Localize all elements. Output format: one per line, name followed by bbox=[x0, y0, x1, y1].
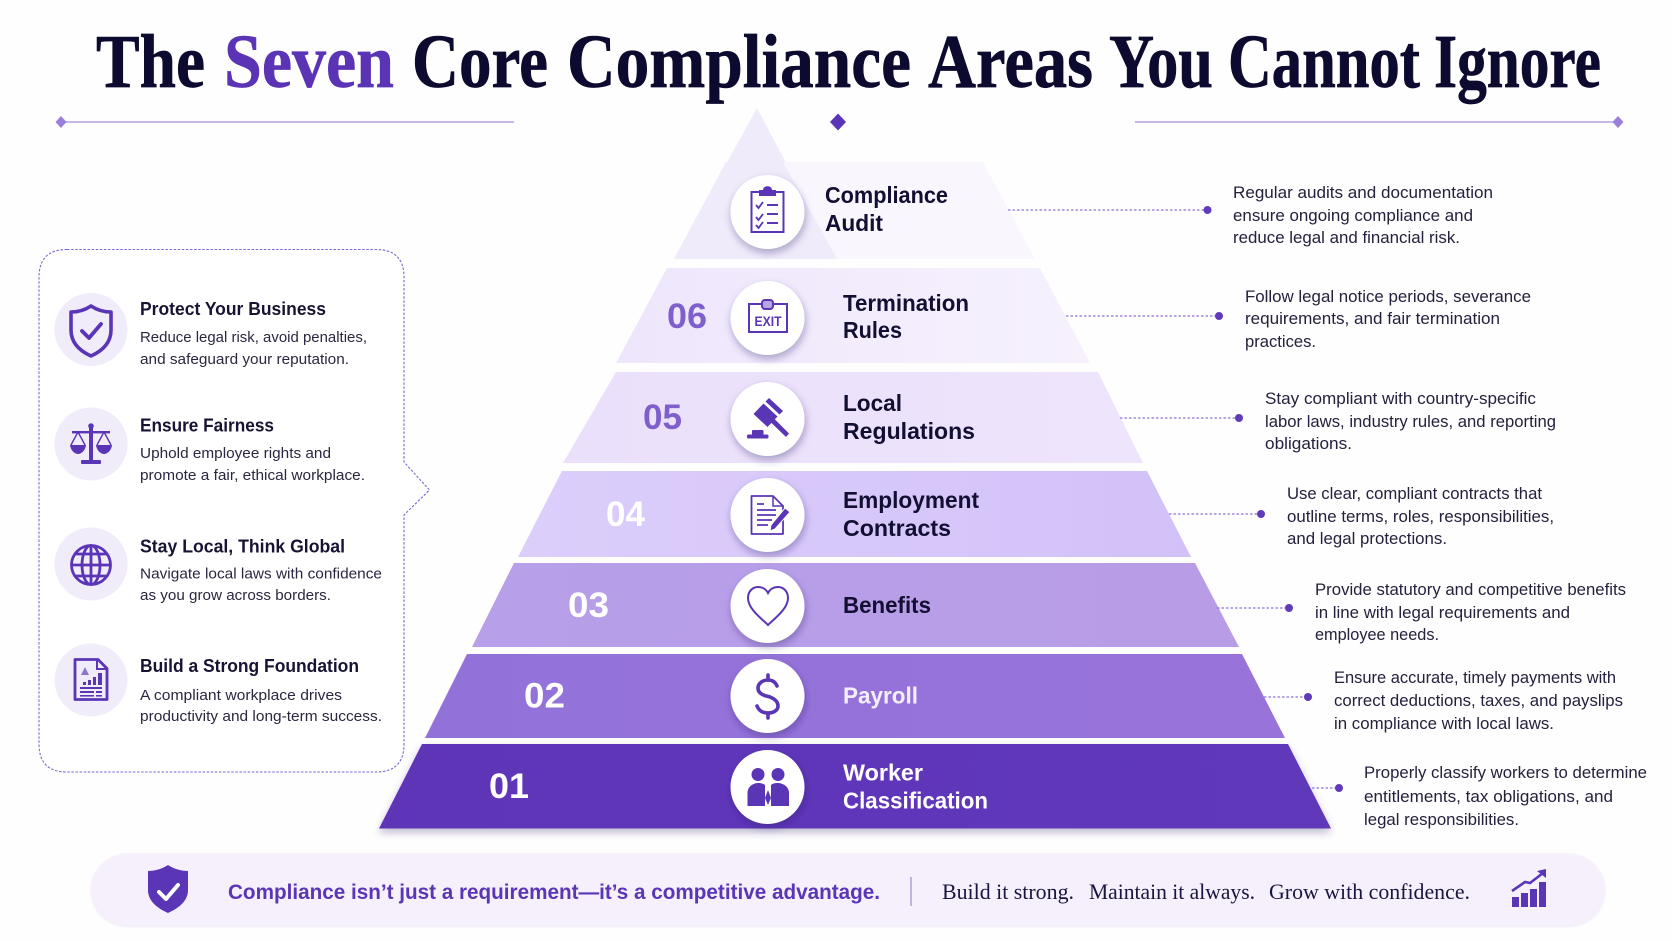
item: ensure fairness: promote a fair, ethical workplace. bbox=[140, 467, 365, 484]
tier 5: local regulations: 05 bbox=[643, 398, 682, 437]
tier 1: worker classification: Worker bbox=[843, 760, 923, 786]
tier 7: compliance audit: Audit bbox=[825, 210, 883, 236]
tier 4: employment contracts: Contracts bbox=[843, 515, 951, 541]
tier 1: worker classification: Classification bbox=[843, 788, 988, 814]
item: protect your business bbox=[54, 293, 367, 368]
icon: growth chart bbox=[1512, 869, 1546, 907]
icon: exit sign bbox=[730, 281, 804, 355]
tier 6: termination rules: Termination bbox=[843, 290, 969, 316]
callout: local regulations bbox=[1120, 390, 1556, 453]
tier 3: benefits: Benefits bbox=[843, 592, 931, 618]
icon: exit sign: EXIT bbox=[754, 313, 782, 329]
item: protect your business: Protect Your Business bbox=[140, 299, 326, 319]
pyramid bbox=[379, 108, 1331, 828]
callout: worker classification: legal responsibilities. bbox=[1364, 811, 1519, 829]
callout: local regulations: Stay compliant with country-specific bbox=[1265, 390, 1536, 408]
item: build a strong foundation bbox=[54, 644, 382, 725]
tier 7: compliance audit: Compliance bbox=[825, 182, 948, 208]
tier 5: local regulations bbox=[563, 372, 1143, 463]
item: protect your business: and safeguard your reputation. bbox=[140, 351, 349, 368]
callout: worker classification: entitlements, tax obligations, and bbox=[1364, 788, 1613, 806]
tier 3: benefits: 03 bbox=[568, 586, 609, 625]
tier 6: termination rules bbox=[616, 268, 1090, 363]
item: stay local think global: Navigate local laws with confidence bbox=[140, 566, 382, 582]
bottom banner bbox=[91, 854, 1605, 926]
item: build a strong foundation: Build a Strong Foundation bbox=[140, 656, 359, 676]
item: protect your business: Reduce legal risk, avoid penalties, bbox=[140, 329, 367, 346]
tier 2: payroll bbox=[425, 654, 1285, 738]
tier 4: employment contracts: Employment bbox=[843, 487, 979, 513]
title: Cannot bbox=[1228, 20, 1420, 104]
tier 2: payroll: Payroll bbox=[843, 682, 918, 708]
callout: employment contracts bbox=[1169, 485, 1554, 548]
tier 6: termination rules: 06 bbox=[667, 297, 707, 336]
tier 3: benefits bbox=[472, 563, 1239, 647]
title: Compliance bbox=[567, 20, 911, 104]
callout: employment contracts: outline terms, roles, responsibilities, bbox=[1287, 508, 1554, 526]
item: stay local think global: as you grow across borders. bbox=[140, 587, 331, 604]
callout: benefits: employee needs. bbox=[1315, 626, 1439, 644]
icon: two workers bbox=[730, 750, 804, 824]
callout: payroll bbox=[1264, 669, 1623, 733]
banner tagline: Build it strong. bbox=[942, 879, 1074, 904]
icon: shield check bbox=[148, 865, 188, 913]
callout: benefits bbox=[1217, 581, 1626, 644]
callout: local regulations: labor laws, industry rules, and reporting bbox=[1265, 413, 1556, 431]
tier 6: termination rules: Rules bbox=[843, 317, 902, 343]
callout: benefits: in line with legal requirements and bbox=[1315, 604, 1570, 622]
panel outline with pointer bbox=[39, 250, 430, 772]
tier 4: employment contracts bbox=[518, 471, 1191, 557]
title: You bbox=[1109, 20, 1213, 104]
callout: compliance audit: Regular audits and documentation bbox=[1233, 184, 1493, 202]
item: build a strong foundation: A compliant workplace drives bbox=[140, 687, 342, 704]
tier 2: payroll: 02 bbox=[524, 676, 565, 716]
icon: heart bbox=[730, 569, 804, 643]
item: stay local think global: Stay Local, Think Global bbox=[140, 537, 345, 557]
icon: contract with pen bbox=[730, 478, 804, 552]
callout: termination rules bbox=[1066, 288, 1531, 351]
item: ensure fairness bbox=[54, 408, 365, 484]
panel: why compliance matters bbox=[39, 250, 430, 772]
callout: benefits: Provide statutory and competitive benefits bbox=[1315, 581, 1626, 599]
callout: payroll: in compliance with local laws. bbox=[1334, 715, 1554, 733]
icon: gavel bbox=[730, 382, 804, 456]
title: Seven bbox=[224, 20, 394, 104]
tier 5: local regulations: Local bbox=[843, 390, 902, 416]
tier 1: worker classification bbox=[379, 744, 1331, 828]
title bbox=[96, 20, 1601, 104]
banner message: Compliance isn’t just a requirement—it’s a competitive advantage. bbox=[228, 881, 880, 904]
callout: compliance audit: ensure ongoing compliance and bbox=[1233, 207, 1473, 225]
banner tagline: Grow with confidence. bbox=[1269, 879, 1470, 904]
callout: payroll: Ensure accurate, timely payments with bbox=[1334, 669, 1616, 687]
title: Ignore bbox=[1434, 20, 1601, 104]
callout: payroll: correct deductions, taxes, and payslips bbox=[1334, 692, 1623, 710]
tier 5: local regulations: Regulations bbox=[843, 418, 975, 444]
callout: termination rules: practices. bbox=[1245, 333, 1316, 351]
callout: employment contracts: and legal protections. bbox=[1287, 530, 1447, 548]
icon: clipboard checklist bbox=[730, 175, 804, 249]
callout: compliance audit bbox=[1008, 184, 1493, 247]
banner tagline bbox=[942, 879, 1470, 904]
banner tagline: Maintain it always. bbox=[1089, 879, 1255, 904]
title: Core bbox=[412, 20, 548, 104]
item: ensure fairness: Uphold employee rights and bbox=[140, 445, 331, 462]
callout: worker classification bbox=[1312, 764, 1647, 829]
callout: worker classification: Properly classify workers to determine bbox=[1364, 764, 1647, 782]
title: Areas bbox=[928, 20, 1093, 104]
callout: termination rules: Follow legal notice periods, severance bbox=[1245, 288, 1531, 306]
callout: employment contracts: Use clear, compliant contracts that bbox=[1287, 485, 1542, 503]
tier 4: employment contracts: 04 bbox=[606, 495, 646, 534]
callout: termination rules: requirements, and fair termination bbox=[1245, 310, 1500, 328]
callout: compliance audit: reduce legal and financial risk. bbox=[1233, 229, 1460, 247]
title: The bbox=[96, 20, 205, 104]
item: stay local think global bbox=[54, 528, 382, 604]
item: ensure fairness: Ensure Fairness bbox=[140, 416, 274, 436]
title divider bbox=[56, 114, 1624, 130]
callout: local regulations: obligations. bbox=[1265, 435, 1352, 453]
tier 7: compliance audit bbox=[674, 108, 1035, 259]
tier 1: worker classification: 01 bbox=[489, 767, 529, 806]
item: build a strong foundation: productivity and long-term success. bbox=[140, 708, 382, 725]
icon: dollar sign bbox=[730, 659, 804, 733]
